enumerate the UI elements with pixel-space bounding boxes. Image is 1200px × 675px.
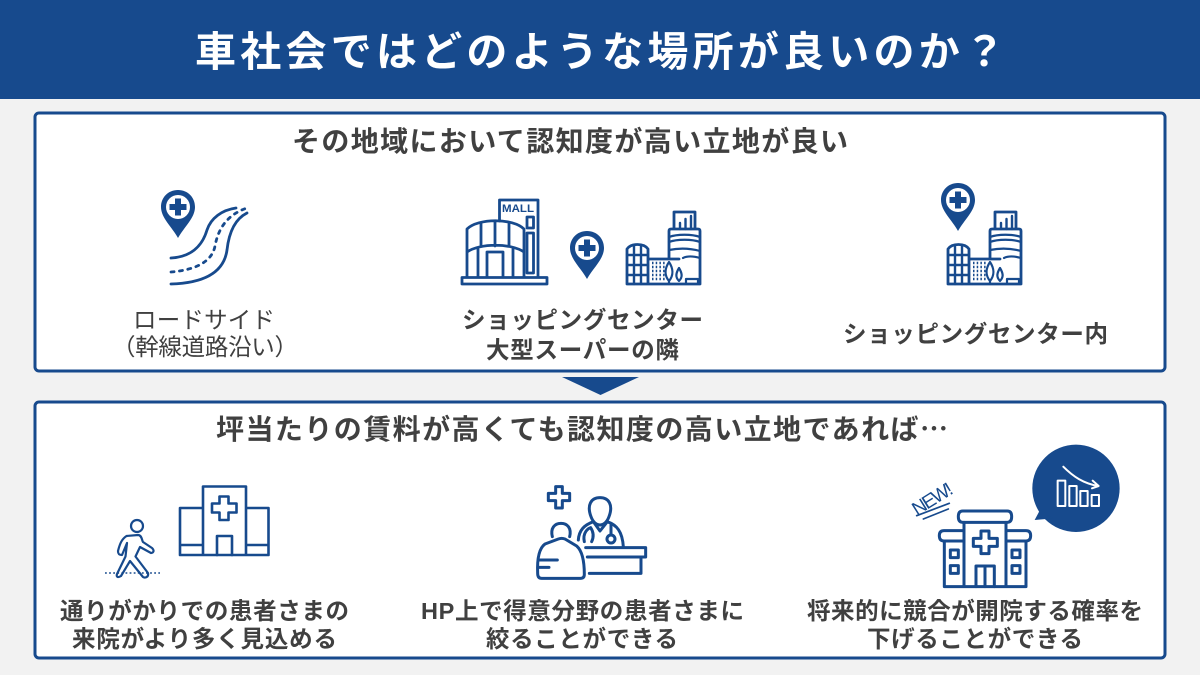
title banner <box>0 0 1200 99</box>
icon: pedestrian and clinic <box>105 486 268 578</box>
heading: benefits of high rent location: 坪当たりの賃料が高くても認知度の高い立地であれば… <box>216 408 948 448</box>
icon: roadside pin and road <box>161 190 247 284</box>
label: roadside: ロードサイド <box>133 307 275 333</box>
label: more passing patients: 来院がより多く見込める <box>72 625 337 652</box>
arrow: down triangle <box>562 377 639 395</box>
label: roadside <box>112 307 298 360</box>
icon: doctor and patient at desk <box>538 487 646 578</box>
label: inside shopping centre: ショッピングセンター内 <box>843 320 1108 347</box>
icon: pin and shopping complex <box>941 183 1021 284</box>
label: next to shopping centre: 大型スーパーの隣 <box>486 337 679 363</box>
label: narrow down patients via website: 絞ることができる <box>486 625 678 652</box>
text: new: NEW! <box>909 479 957 520</box>
label: next to shopping centre: ショッピングセンター <box>462 306 703 333</box>
panel: location recognition <box>35 113 1165 371</box>
label: lower probability of competitors: 下げることができる <box>867 625 1083 652</box>
icon: mall, pin and shopping complex <box>462 200 700 284</box>
label: narrow down patients via website: HP上で得意分野の患者さまに <box>421 598 744 624</box>
panel: benefits <box>35 402 1165 658</box>
label: roadside: （幹線道路沿い） <box>112 334 298 360</box>
icon: speech bubble with falling chart <box>1032 445 1120 532</box>
heading: recognisable location: その地域において認知度が高い立地が良い <box>292 125 848 157</box>
label: lower probability of competitors <box>807 597 1143 652</box>
title banner: 車社会ではどのような場所が良いのか？ <box>195 29 1005 75</box>
text: mall sign: MALL <box>502 203 534 215</box>
label: next to shopping centre <box>462 306 703 363</box>
label: lower probability of competitors: 将来的に競合が開院する確率を <box>807 597 1143 624</box>
label: more passing patients: 通りがかりでの患者さまの <box>60 597 349 624</box>
label: narrow down patients via website <box>421 598 744 652</box>
icon: new clinic and declining chart bubble <box>909 445 1120 587</box>
label: more passing patients <box>60 597 349 652</box>
